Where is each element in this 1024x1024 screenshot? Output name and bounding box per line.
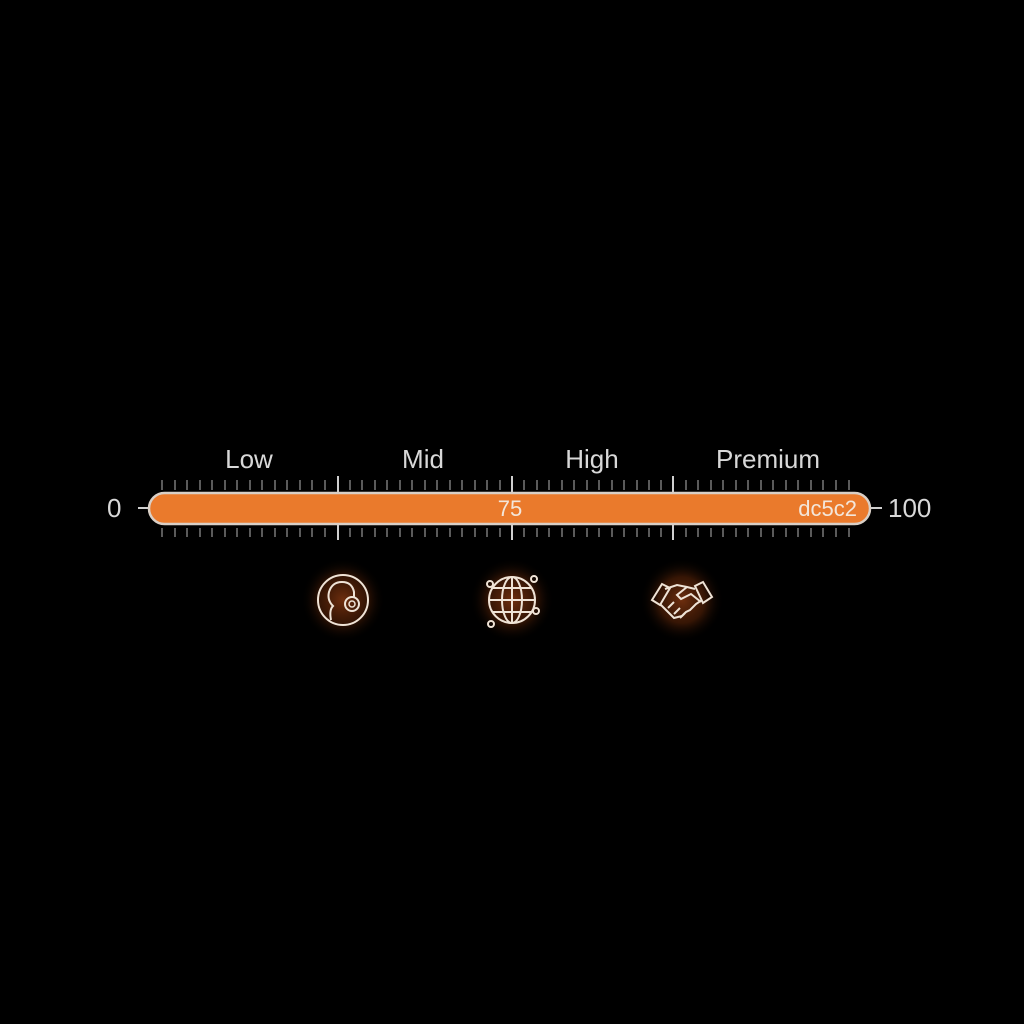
progress bar: 75	[498, 496, 522, 521]
segment labels: Low	[225, 444, 273, 474]
segment labels	[225, 444, 820, 474]
icon: globe network	[470, 558, 554, 642]
icon: person with magnifier	[301, 558, 385, 642]
progress bar	[149, 493, 870, 524]
tick marks	[162, 480, 849, 537]
segment labels: Premium	[716, 444, 820, 474]
progress bar: dc5c2	[798, 496, 857, 521]
icon: handshake	[640, 558, 724, 642]
end labels: 100	[888, 493, 931, 523]
end labels: 0	[107, 493, 121, 523]
end labels	[107, 493, 931, 523]
segment labels: High	[565, 444, 619, 474]
segment labels: Mid	[402, 444, 444, 474]
